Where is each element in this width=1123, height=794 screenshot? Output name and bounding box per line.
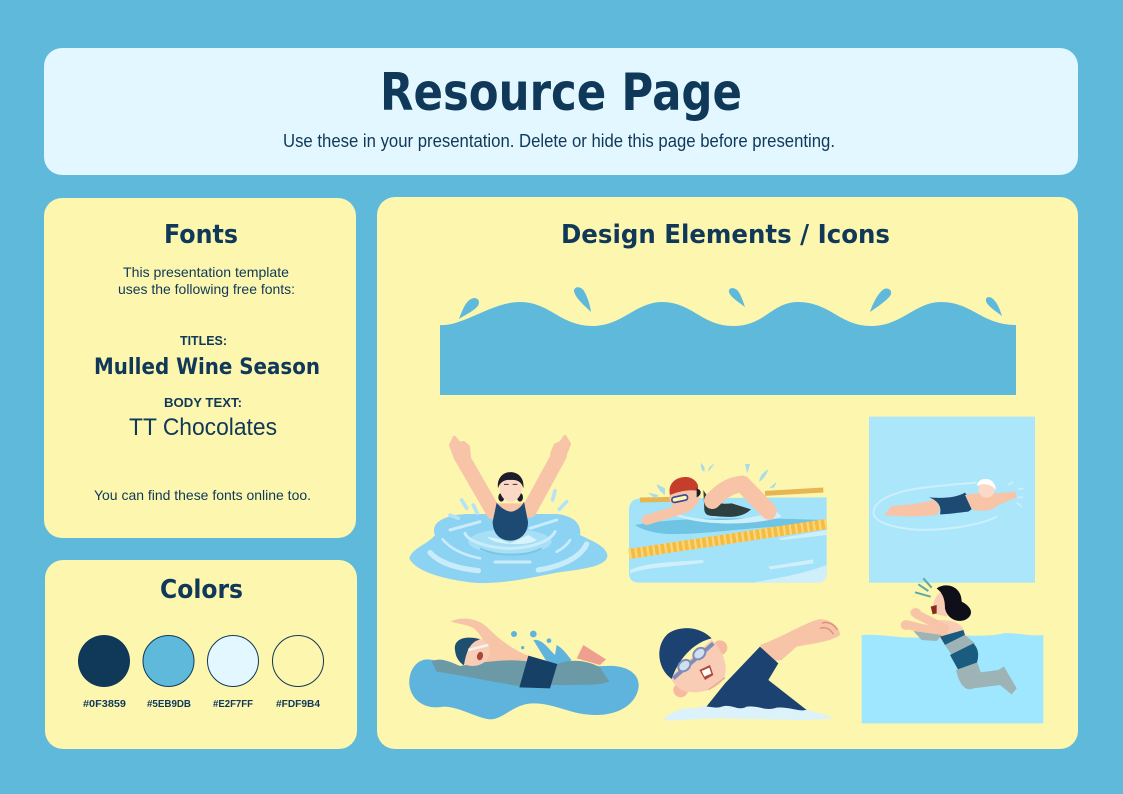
panel: colors: [45, 560, 357, 749]
water and jumping swimmer: [862, 633, 1043, 723]
swatch: yellow: [272, 636, 324, 710]
fonts heading: Fonts: [164, 220, 238, 250]
fonts intro text: uses the following free fonts:: [118, 281, 295, 297]
swatch: navy: [78, 635, 130, 710]
square backdrop with swimmer: [869, 417, 1035, 583]
panel: header: [44, 48, 1078, 175]
swatch: blue: [143, 636, 194, 710]
colors heading: Colors: [160, 575, 243, 605]
swatch: pale blue: #E2F7FF: [213, 699, 253, 710]
body text label: BODY TEXT:: [164, 395, 242, 410]
fonts intro text: This presentation template: [123, 264, 289, 280]
illustration: swimmer with raised arms: [409, 437, 607, 583]
swatch: pale blue: [208, 636, 258, 710]
panel: design elements: [377, 197, 1078, 749]
panel: fonts: [44, 198, 356, 538]
title font name: Mulled Wine Season: [94, 355, 320, 380]
subtitle: Use these in your presentation. Delete or hide this page before presenting.: [283, 131, 835, 151]
body font name: TT Chocolates: [129, 414, 277, 441]
title: Resource Page: [380, 63, 742, 123]
titles label: TITLES:: [180, 333, 227, 348]
fonts footer text: You can find these fonts online too.: [94, 487, 311, 503]
fonts intro text: [118, 264, 295, 297]
illustration: swimmer with goggles: [659, 578, 1043, 723]
design elements heading: Design Elements / Icons: [561, 220, 890, 250]
swatch: yellow: #FDF9B4: [276, 699, 320, 710]
wave banner: [440, 287, 1016, 395]
swatch: blue: #5EB9DB: [147, 699, 191, 710]
illustration: swimmer in blue puddle: [409, 619, 639, 719]
illustration: freestyle swimmer with lane rope: [629, 417, 1035, 583]
swatch: navy: #0F3859: [83, 699, 126, 710]
